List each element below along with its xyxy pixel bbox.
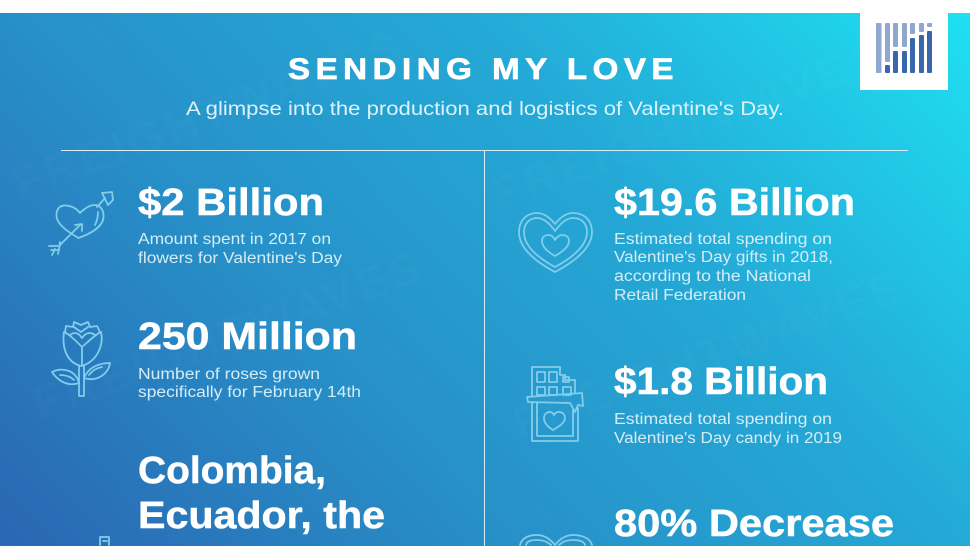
stat: Colombia, Ecuador, the: Colombia, bbox=[138, 450, 326, 492]
watermark: FREIGHTWAVES bbox=[26, 239, 431, 429]
icon: heart with arrow bbox=[49, 192, 113, 255]
stat: $1.8 Billion: Valentine's Day candy in 2019 bbox=[614, 430, 842, 447]
stat: $19.6 Billion bbox=[614, 182, 855, 304]
stat: $2 Billion: $2 Billion bbox=[138, 182, 324, 224]
icon: nested hearts bbox=[519, 213, 592, 272]
stat: Colombia, Ecuador, the bbox=[138, 450, 385, 537]
icon: rose bbox=[52, 322, 110, 396]
stat: $19.6 Billion: $19.6 Billion bbox=[614, 182, 855, 224]
stat: $19.6 Billion: Estimated total spending on bbox=[614, 231, 832, 248]
subtitle: A glimpse into the production and logistics of Valentine's Day. bbox=[186, 98, 784, 120]
stat: $1.8 Billion: Estimated total spending on bbox=[614, 411, 832, 428]
icon: partial at bottom left bbox=[100, 537, 109, 545]
stat: $19.6 Billion: Retail Federation bbox=[614, 287, 746, 304]
stat: $2 Billion: flowers for Valentine's Day bbox=[138, 250, 342, 267]
logo bbox=[860, 13, 948, 90]
icon: chocolate bar bbox=[527, 367, 583, 441]
stat: $19.6 Billion: according to the National bbox=[614, 268, 811, 285]
vertical divider bbox=[484, 151, 485, 546]
watermark: FREIGHTWAVES bbox=[486, 29, 891, 219]
stat: 80% Decrease: 80% Decrease bbox=[614, 503, 894, 545]
stat: $2 Billion: Amount spent in 2017 on bbox=[138, 231, 331, 248]
horizontal divider bbox=[61, 150, 908, 151]
stat: 250 Million bbox=[138, 316, 361, 401]
stat: $1.8 Billion bbox=[614, 361, 842, 447]
stat: Colombia, Ecuador, the: Ecuador, the bbox=[138, 495, 385, 537]
watermark: FREIGHTWAVES bbox=[506, 259, 911, 449]
stat: 250 Million: 250 Million bbox=[138, 316, 357, 358]
stat: 250 Million: Number of roses grown bbox=[138, 366, 320, 383]
title: SENDING MY LOVE bbox=[288, 53, 679, 86]
top white strip bbox=[0, 0, 970, 13]
stat: $2 Billion bbox=[138, 182, 342, 267]
stat: $1.8 Billion: $1.8 Billion bbox=[614, 361, 828, 403]
watermark bbox=[6, 19, 911, 449]
watermark: FREIGHTWAVES bbox=[6, 19, 411, 209]
icon: partial hearts at bottom right bbox=[520, 535, 592, 545]
stat: $19.6 Billion: Valentine's Day gifts in 2018, bbox=[614, 249, 833, 266]
stat: 250 Million: specifically for February 14th bbox=[138, 384, 361, 401]
